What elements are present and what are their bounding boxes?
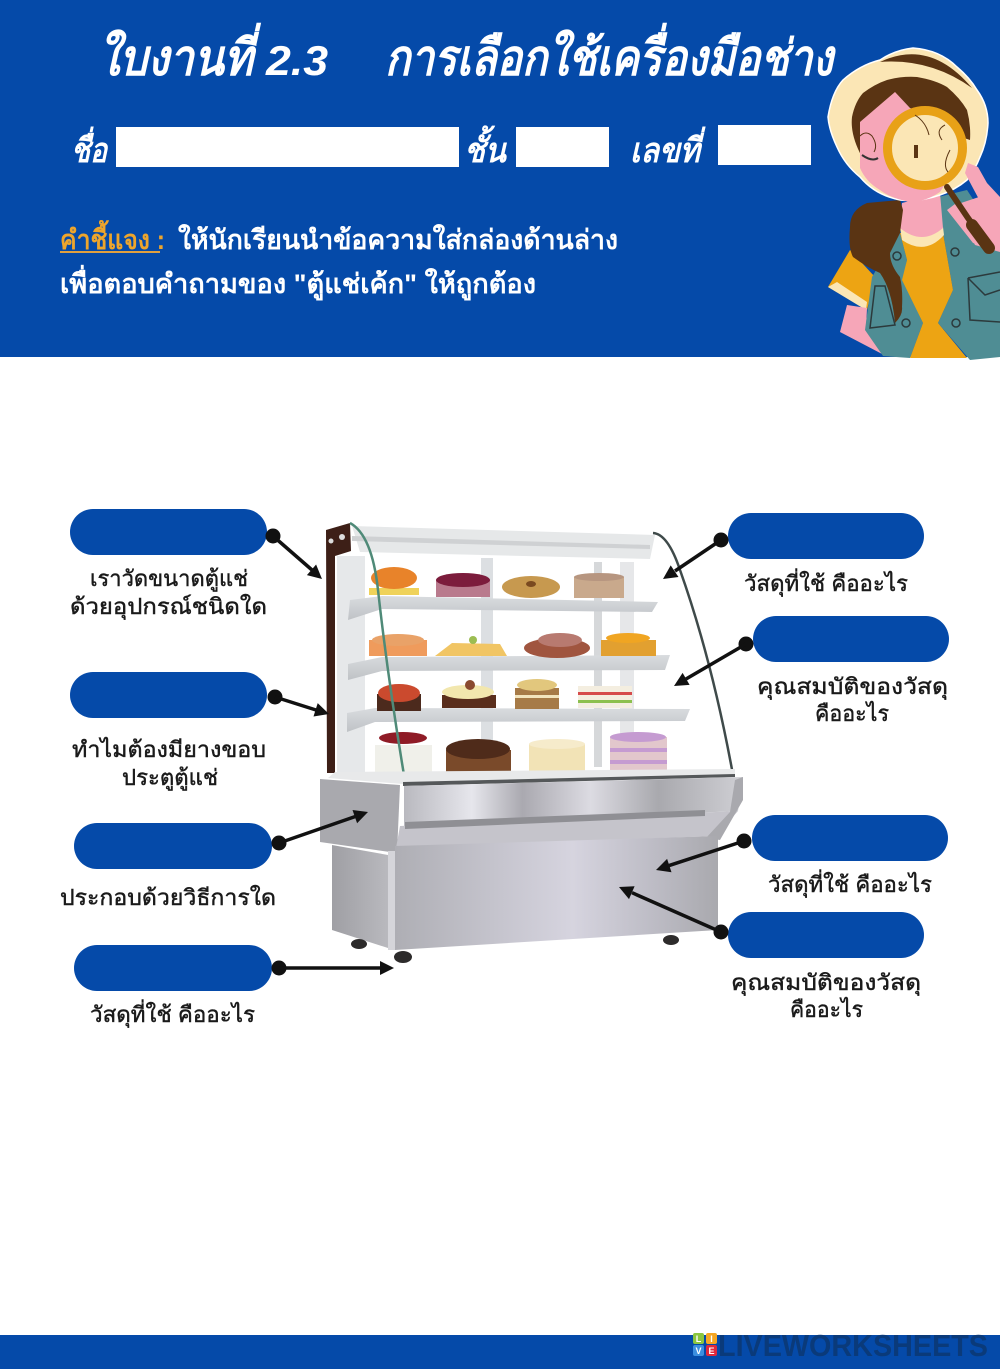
answer box left 2 [70, 672, 267, 718]
question left 1: เราวัดขนาดตู้แช่ [90, 566, 248, 592]
answer box right 3 [752, 815, 948, 861]
header banner [0, 0, 1000, 357]
answer box left 4 [74, 945, 272, 991]
question right 2: คืออะไร [815, 701, 889, 726]
arrow left 3 [272, 810, 368, 850]
answer box right 1 [728, 513, 924, 559]
arrow left 1 [266, 528, 322, 579]
liveworksheets watermark: I [710, 1334, 713, 1344]
arrow right 2 [674, 636, 754, 686]
answer box left 1 [70, 509, 267, 555]
question left 4: วัสดุที่ใช้ คืออะไร [90, 999, 255, 1028]
cakes [369, 567, 667, 777]
curved glass door [350, 523, 733, 781]
title: การเลือกใช้เครื่องมือช่าง [385, 22, 836, 86]
steel counter [320, 769, 743, 853]
question left 1: ด้วยอุปกรณ์ชนิดใด [70, 594, 267, 620]
answer box right 4 [728, 912, 924, 958]
answer box left 3 [74, 823, 272, 869]
question left 2: ประตูตู้แช่ [122, 765, 218, 791]
liveworksheets watermark: L [696, 1334, 702, 1344]
illustration: girl with magnifying glass [828, 48, 1000, 360]
liveworksheets watermark: E [708, 1346, 715, 1356]
arrow left 4 [272, 960, 394, 976]
instructions: คำชี้แจง : [60, 219, 165, 255]
wheels [351, 935, 679, 963]
question right 1: วัสดุที่ใช้ คืออะไร [744, 568, 908, 597]
footer bar [0, 1335, 1000, 1369]
answer box right 2 [753, 616, 949, 662]
question right 4 [731, 970, 921, 1022]
title [98, 22, 836, 86]
name and class fields: เลขที่ [630, 126, 706, 170]
question right 4: คุณสมบัติของวัสดุ [731, 970, 921, 996]
name and class fields: ชั้น [464, 125, 508, 170]
arrow right 4 [619, 886, 728, 940]
shelves [347, 596, 690, 732]
title: 2.3 [265, 37, 328, 84]
instructions: เพื่อตอบคำถามของ "ตู้แช่เค้ก" ให้ถูกต้อง [60, 264, 536, 301]
name and class fields: ชื่อ [71, 126, 108, 170]
liveworksheets watermark: V [695, 1346, 702, 1356]
cabinet back and frame [326, 523, 655, 773]
refrigerated cake display cabinet [320, 523, 743, 963]
question left 1 [70, 566, 267, 620]
arrow left 2 [268, 690, 329, 716]
arrow right 3 [656, 834, 752, 872]
question left 2: ทำไมต้องมียางขอบ [72, 737, 266, 762]
question right 2 [757, 674, 948, 726]
question right 2: คุณสมบัติของวัสดุ [757, 674, 948, 700]
question left 2 [72, 737, 266, 791]
lower cabinet body [332, 836, 718, 950]
question right 3: วัสดุที่ใช้ คืออะไร [768, 869, 932, 898]
arrow right 1 [663, 532, 728, 579]
title: ใบงานที่ [98, 22, 262, 86]
question left 3: ประกอบด้วยวิธีการใด [60, 885, 276, 910]
question right 4: คืออะไร [790, 997, 863, 1022]
instructions [60, 219, 618, 301]
arrows [266, 528, 754, 976]
instructions: ให้นักเรียนนำข้อความใส่กล่องด้านล่าง [178, 224, 618, 255]
name and class fields [71, 125, 811, 170]
